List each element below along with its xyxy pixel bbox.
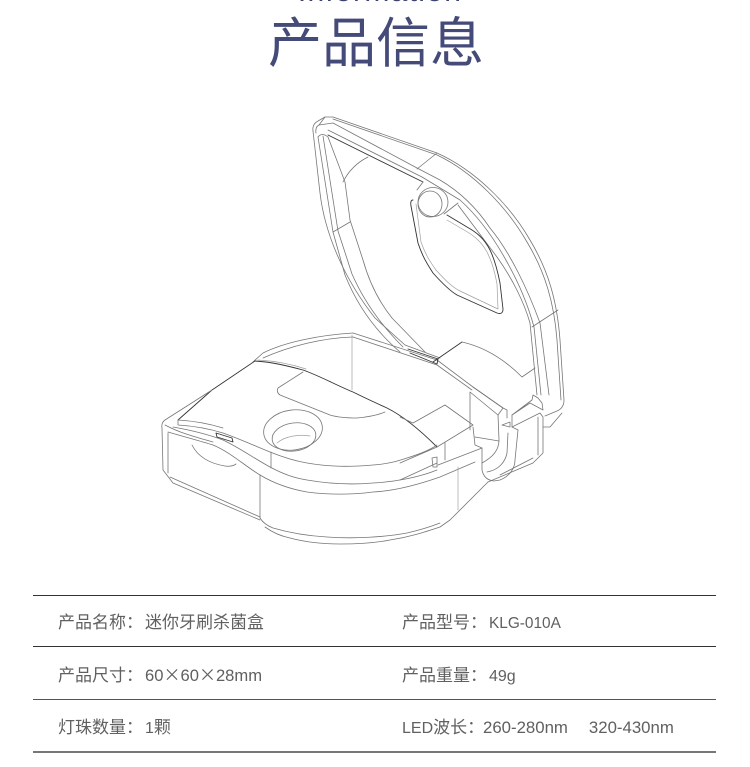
lamp count: 1颗 xyxy=(145,718,171,737)
lid inner rim xyxy=(318,123,558,395)
info table xyxy=(58,613,674,737)
lid round magnet xyxy=(417,182,458,217)
product weight: 49g xyxy=(489,668,516,685)
product model xyxy=(402,613,561,632)
product line drawing xyxy=(161,116,564,544)
title: 产品信息 xyxy=(268,14,484,74)
cover end and channel xyxy=(400,387,518,481)
product size xyxy=(58,661,262,686)
row 1 xyxy=(58,613,561,632)
product model: 产品型号： xyxy=(402,613,487,632)
led wavelength: 260-280nm 320-430nm xyxy=(483,718,674,737)
product name: 产品名称： xyxy=(58,613,143,632)
product name: 迷你牙刷杀菌盒 xyxy=(145,613,264,632)
product size: 60×60×28mm xyxy=(145,661,262,686)
lid leaf window xyxy=(411,200,503,314)
product weight: 产品重量： xyxy=(402,666,487,685)
right hinge block xyxy=(488,395,562,482)
row 2 xyxy=(58,661,516,686)
lamp count: 灯珠数量： xyxy=(58,718,143,737)
base rear rim xyxy=(253,333,503,408)
product size: 产品尺寸： xyxy=(58,666,143,685)
product name xyxy=(58,613,264,632)
row 3 xyxy=(58,718,674,737)
lid outline xyxy=(313,117,564,416)
cover recess xyxy=(277,372,385,418)
led wavelength: LED波长： xyxy=(402,718,484,737)
button slot xyxy=(216,433,233,442)
product model: KLG-010A xyxy=(489,615,561,632)
hinge flap xyxy=(400,342,535,447)
base outer body xyxy=(162,390,488,544)
hole xyxy=(261,406,325,454)
base cover top xyxy=(173,360,437,484)
